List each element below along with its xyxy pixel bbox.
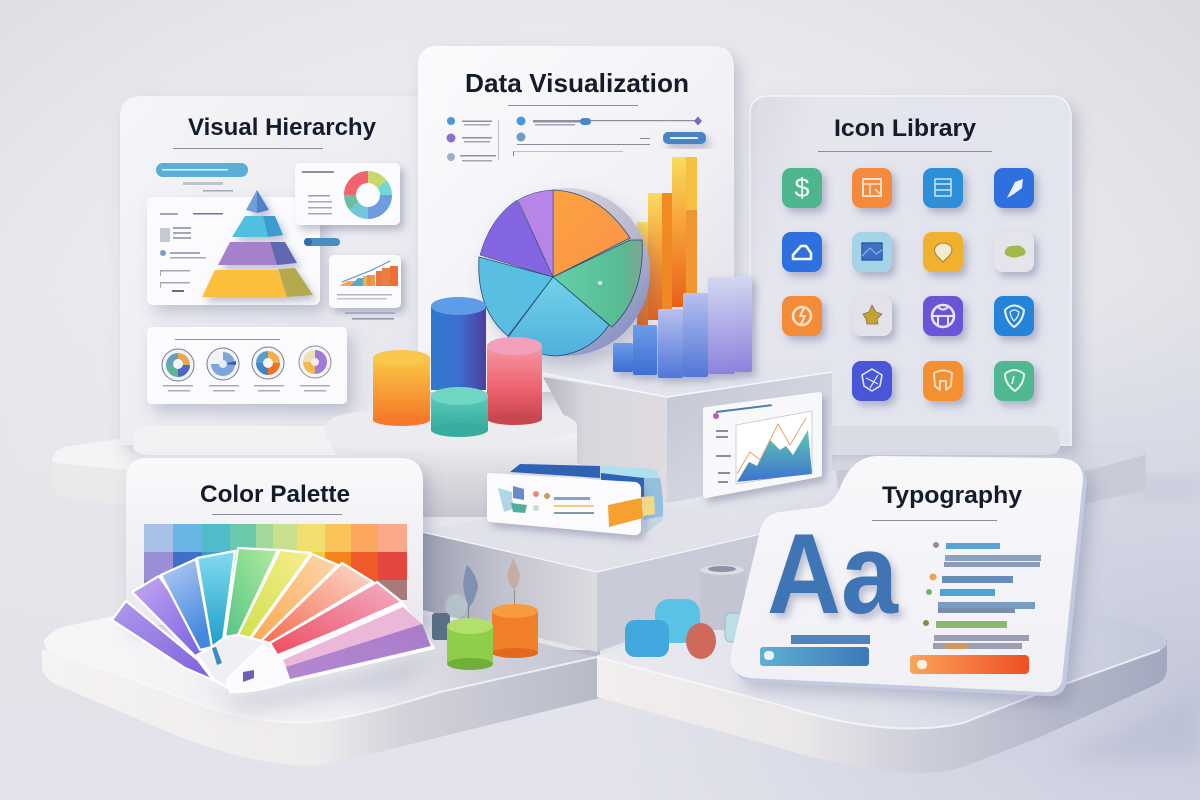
cylinder: blue bbox=[431, 297, 486, 390]
panel: icon library bbox=[750, 96, 1071, 445]
icon: cloud bbox=[782, 232, 822, 272]
legend rows bbox=[446, 117, 499, 162]
icon: feather bbox=[994, 168, 1034, 208]
box front face bbox=[487, 473, 641, 535]
card: pyramid bbox=[147, 197, 320, 305]
3d box with cards bbox=[487, 463, 663, 535]
icon: server bbox=[923, 168, 963, 208]
icon: grid frame bbox=[852, 168, 892, 208]
blade with handle bbox=[227, 604, 434, 692]
icon: shield blue bbox=[994, 296, 1034, 336]
pie slice: light cyan bbox=[508, 277, 609, 356]
panel: visual hierarchy bbox=[120, 96, 418, 445]
fan base whites bbox=[197, 635, 280, 690]
icon: globe bbox=[923, 296, 963, 336]
title: color palette: Color Palette bbox=[200, 481, 350, 508]
blue purple bar chart bbox=[613, 276, 752, 378]
card: bar chart bbox=[329, 255, 401, 308]
fan shadow bbox=[190, 655, 440, 712]
title: data visualization: Data Visualization bbox=[465, 68, 689, 98]
candle: orange bbox=[492, 558, 538, 658]
icon: dollar bbox=[782, 168, 822, 208]
blue block left bbox=[625, 620, 669, 657]
metric circle 3 bbox=[252, 347, 284, 379]
metric circle 4 bbox=[299, 346, 331, 378]
large aa specimen: Aa bbox=[767, 511, 899, 638]
slider rows bbox=[513, 116, 702, 156]
icon: green blob bbox=[994, 232, 1034, 272]
metric circle 1 bbox=[162, 349, 194, 381]
icon: gold star bbox=[852, 296, 892, 336]
button bbox=[663, 132, 706, 144]
back right platform bbox=[832, 443, 1146, 503]
icon: dollar: $ bbox=[794, 173, 810, 203]
small area chart card bbox=[703, 392, 822, 498]
panel: typography bbox=[731, 456, 1087, 696]
donut bbox=[350, 177, 386, 213]
front left platform bbox=[42, 616, 600, 765]
text sample bars bbox=[923, 542, 1041, 649]
pie slice: green bbox=[553, 240, 642, 327]
title: visual hierarchy: Visual Hierarchy bbox=[188, 114, 377, 141]
swatch grid bbox=[144, 524, 407, 600]
cylinder: yellow orange bbox=[373, 350, 430, 426]
panel: color palette bbox=[126, 458, 423, 625]
pie slice: light violet bbox=[518, 190, 553, 277]
central lower block bbox=[423, 497, 765, 652]
pie slice: violet bbox=[480, 200, 553, 277]
metric circle 2 bbox=[207, 348, 239, 380]
fan blades bbox=[112, 548, 402, 680]
orange cube bbox=[608, 498, 643, 527]
base of visual hierarchy panel bbox=[133, 426, 340, 455]
icon: indigo badge bbox=[852, 361, 892, 401]
front right platform bbox=[597, 585, 1167, 773]
panel: data visualization bbox=[418, 46, 734, 392]
icon: golden emblem bbox=[923, 232, 963, 272]
orange bar chart bbox=[637, 157, 697, 330]
card: donut chart bbox=[295, 163, 400, 225]
color fan bbox=[112, 548, 440, 712]
blue label pill bbox=[156, 163, 248, 192]
blue block right bbox=[655, 599, 700, 643]
grey cylinder bbox=[700, 565, 745, 630]
pie slice: blue cyan bbox=[479, 257, 553, 336]
orange bar bbox=[910, 655, 1029, 674]
candle: green bbox=[432, 565, 493, 670]
icon: orange figure bbox=[923, 361, 963, 401]
title: icon library: Icon Library bbox=[834, 115, 977, 142]
cylinder group bbox=[373, 297, 542, 437]
small 3d objects bbox=[625, 565, 745, 659]
title: typography: Typography bbox=[882, 482, 1023, 509]
icon: orange target bbox=[782, 296, 822, 336]
pie chart bbox=[479, 188, 650, 356]
left middle block bbox=[325, 410, 577, 517]
icon: picture bbox=[852, 232, 892, 272]
base of icon library panel bbox=[832, 426, 1060, 455]
central upper block bbox=[530, 351, 832, 503]
cylinder: pink red bbox=[487, 337, 542, 425]
icon: green shield bbox=[994, 361, 1034, 401]
cylinder: teal bbox=[431, 387, 488, 437]
small pill bbox=[304, 238, 340, 246]
card: circular metrics bbox=[147, 327, 347, 404]
pyramid bbox=[202, 190, 313, 297]
pie slice: orange bbox=[553, 190, 630, 277]
icon grid bbox=[782, 168, 1034, 401]
back left platform bbox=[52, 438, 340, 505]
teal cup bbox=[725, 613, 743, 642]
red ball bbox=[686, 623, 716, 659]
blue bars bbox=[760, 635, 870, 666]
